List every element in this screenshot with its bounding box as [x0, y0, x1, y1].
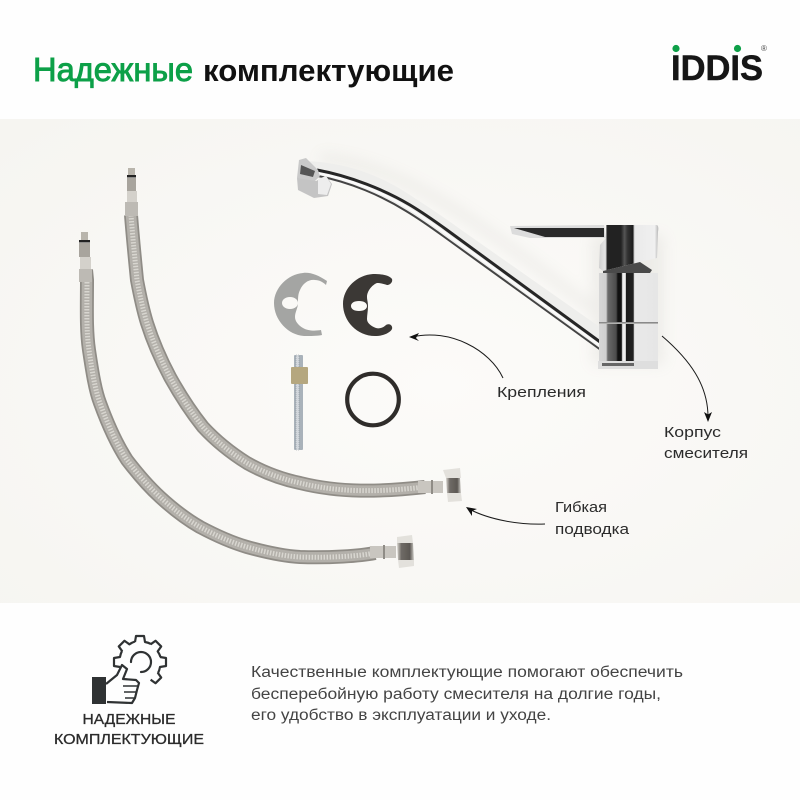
description text: Качественные комплектующие помогают обеспечить — [251, 664, 683, 681]
faucet lever — [510, 225, 606, 238]
callout: Крепления: Крепления — [497, 384, 586, 401]
icon caption: КОМПЛЕКТУЮЩИЕ — [54, 731, 204, 748]
rubber O-ring — [347, 374, 399, 425]
icon caption — [54, 711, 204, 748]
callout: Корпус смесителя: Корпус — [664, 424, 722, 441]
description text: бесперебойную работу смесителя на долгие годы, — [251, 686, 661, 703]
black washer — [343, 274, 392, 336]
flexible hose 2 — [86, 270, 375, 557]
title: Надежные — [33, 51, 193, 88]
icon caption: НАДЕЖНЫЕ — [82, 711, 176, 728]
flexible hose 1 — [131, 215, 425, 491]
callout: Гибкая подводка — [466, 499, 630, 538]
hose 2 top fitting — [79, 232, 92, 282]
description text — [251, 664, 683, 724]
faucet head — [599, 225, 658, 271]
faucet body — [598, 262, 658, 369]
hose 1 bottom nut — [418, 468, 462, 502]
callout: Корпус смесителя — [662, 336, 748, 462]
faucet aerator — [297, 158, 332, 198]
callout: Корпус смесителя: смесителя — [664, 445, 748, 462]
callout: Гибкая подводка: Гибкая — [555, 499, 607, 516]
title — [33, 51, 454, 88]
faucet spout — [303, 161, 607, 353]
description text: его удобство в эксплуатации и уходе. — [251, 707, 551, 724]
photo panel: faucet components — [0, 119, 800, 603]
soft shadows — [320, 158, 664, 365]
icon: gear and thumbs up — [92, 636, 166, 704]
logo: IDDIS: IDDIS — [671, 49, 763, 88]
grey washer — [274, 273, 327, 336]
title: комплектующие — [203, 53, 454, 88]
threaded stud — [291, 355, 308, 450]
hose 1 top fitting — [125, 168, 138, 216]
logo: IDDIS: ® — [761, 44, 767, 53]
hose 2 bottom nut — [370, 535, 414, 568]
callout: Крепления — [409, 333, 586, 401]
callout: Гибкая подводка: подводка — [555, 521, 630, 538]
